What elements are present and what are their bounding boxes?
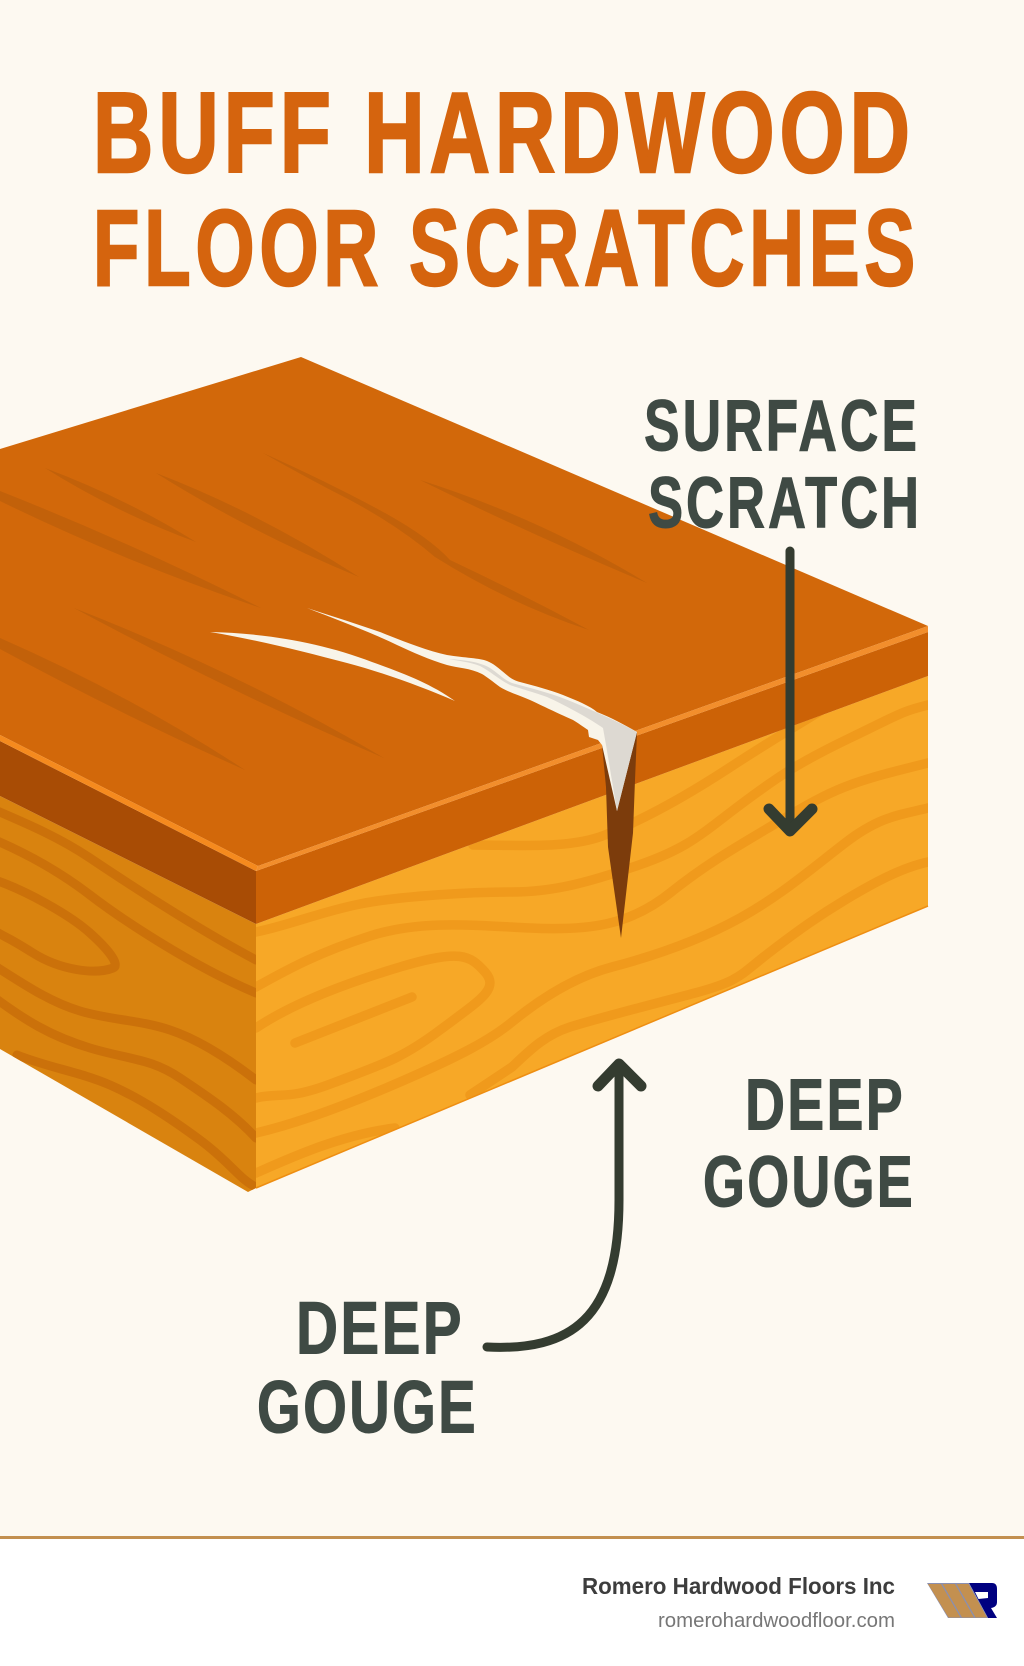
label: deep gouge right: DEEP: [745, 1066, 905, 1146]
wood block illustration: [0, 357, 928, 1192]
label: deep gouge right: [703, 1066, 915, 1222]
footer company name: Romero Hardwood Floors Inc: [582, 1573, 895, 1599]
label: surface scratch: SCRATCH: [648, 464, 922, 544]
front side face: [256, 676, 928, 1188]
footer: [0, 1536, 1024, 1666]
surface grain marks: [0, 453, 647, 770]
top surface: [0, 357, 928, 871]
gouge cut into block: [602, 733, 637, 938]
label: surface scratch: [644, 386, 922, 544]
icon: company logo: [927, 1583, 997, 1618]
footer website: romerohardwoodfloor.com: [658, 1610, 895, 1632]
arrow: deep gouge pointer: [487, 1064, 641, 1347]
surface scratch marks: [210, 608, 637, 938]
top finish band: [0, 632, 928, 924]
title: [93, 70, 920, 308]
label: deep gouge right: GOUGE: [703, 1142, 915, 1222]
long scratch: [307, 608, 637, 811]
label: deep gouge lower left: DEEP: [296, 1286, 464, 1370]
label: deep gouge lower left: [257, 1286, 478, 1448]
arrow: surface scratch pointer: [769, 551, 812, 831]
left side face: [0, 796, 256, 1192]
short scratch: [210, 632, 455, 701]
label: deep gouge lower left: GOUGE: [257, 1366, 478, 1448]
label: surface scratch: SURFACE: [644, 386, 920, 466]
